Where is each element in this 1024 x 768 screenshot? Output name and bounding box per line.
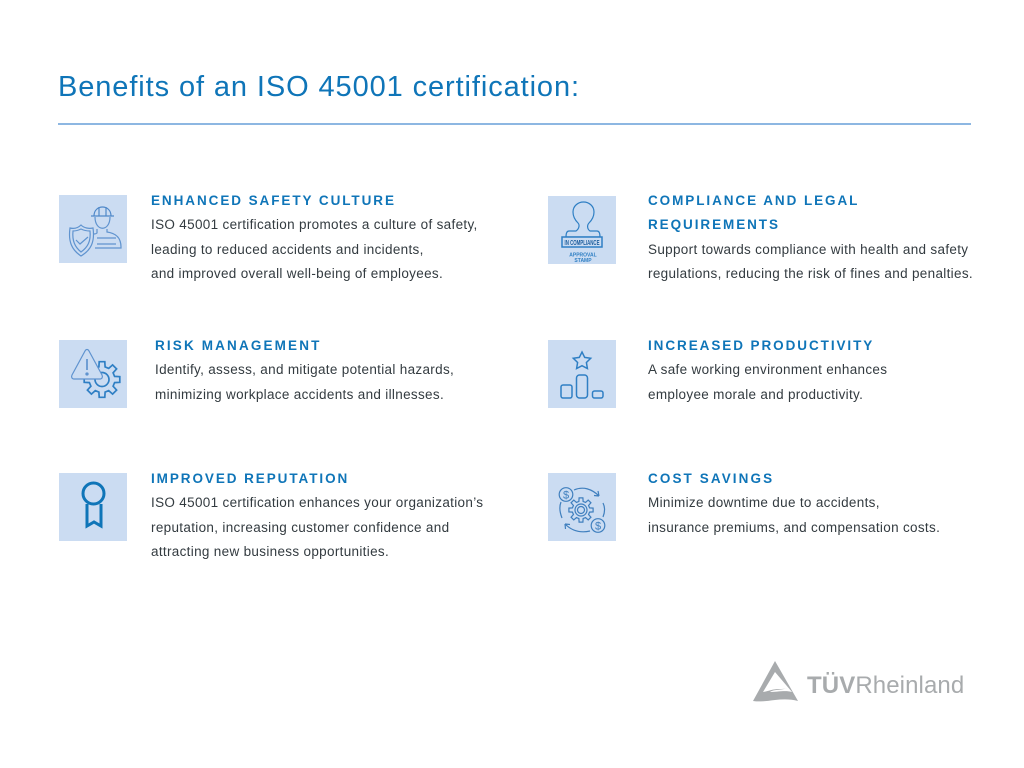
text: increased productivity: A safe working environment enhances: [648, 362, 887, 377]
icon: logo triangle: [753, 661, 798, 702]
text: risk management: RISK MANAGEMENT: [155, 338, 322, 352]
text: risk management: [155, 338, 454, 402]
text: enhanced safety culture: ISO 45001 certification promotes a culture of safety,: [151, 217, 478, 232]
logo: TÜV Rheinland: [753, 661, 964, 702]
text: increased productivity: employee morale and productivity.: [648, 386, 863, 402]
text: cost savings: COST SAVINGS: [648, 470, 774, 486]
icon: ribbon medal: [59, 473, 127, 541]
text: cost savings: Minimize downtime due to accidents,: [648, 495, 880, 510]
text: improved reputation: reputation, increasing customer confidence and: [151, 520, 449, 534]
icon: compliance stamp: [548, 196, 616, 264]
text: compliance and legal requirements: regulations, reducing the risk of fines and penalties.: [648, 266, 973, 281]
text: enhanced safety culture: leading to reduced accidents and incidents,: [151, 242, 424, 256]
text: improved reputation: attracting new business opportunities.: [151, 544, 389, 559]
text: enhanced safety culture: ENHANCED SAFETY CULTURE: [151, 192, 396, 208]
text: compliance and legal requirements: COMPLIANCE AND LEGAL: [648, 192, 859, 208]
icon: hazard warning and gear: [59, 340, 127, 408]
text: risk management: Identify, assess, and mitigate potential hazards,: [155, 362, 454, 377]
icon: compliance stamp: APPROVAL: [569, 252, 597, 258]
text: compliance and legal requirements: [648, 192, 973, 281]
title: Benefits of an ISO 45001 certification:: [58, 71, 580, 103]
icon: cost savings gear and coins: $: [595, 520, 601, 532]
text: improved reputation: [151, 470, 483, 559]
text: compliance and legal requirements: Support towards compliance with health and safety: [648, 242, 968, 256]
icon: compliance stamp: STAMP: [574, 258, 592, 264]
text: enhanced safety culture: and improved overall well-being of employees.: [151, 266, 443, 281]
text: compliance and legal requirements: REQUIREMENTS: [648, 217, 780, 232]
text: improved reputation: IMPROVED REPUTATION: [151, 470, 349, 486]
logo wordmark: TÜVRheinland: [807, 672, 964, 699]
text: increased productivity: [648, 338, 887, 402]
text: improved reputation: ISO 45001 certification enhances your organization’s: [151, 495, 483, 510]
text: risk management: minimizing workplace accidents and illnesses.: [155, 386, 444, 402]
icon: safety worker and shield: [59, 195, 127, 263]
icon: cost savings gear and coins: $: [563, 490, 569, 502]
text: enhanced safety culture: [151, 192, 478, 281]
text: cost savings: insurance premiums, and compensation costs.: [648, 520, 940, 534]
text: cost savings: [648, 470, 940, 535]
text: increased productivity: INCREASED PRODUCTIVITY: [648, 338, 874, 352]
icon: cost savings gear and coins: [548, 473, 616, 541]
icon: star and bars: [548, 340, 616, 408]
